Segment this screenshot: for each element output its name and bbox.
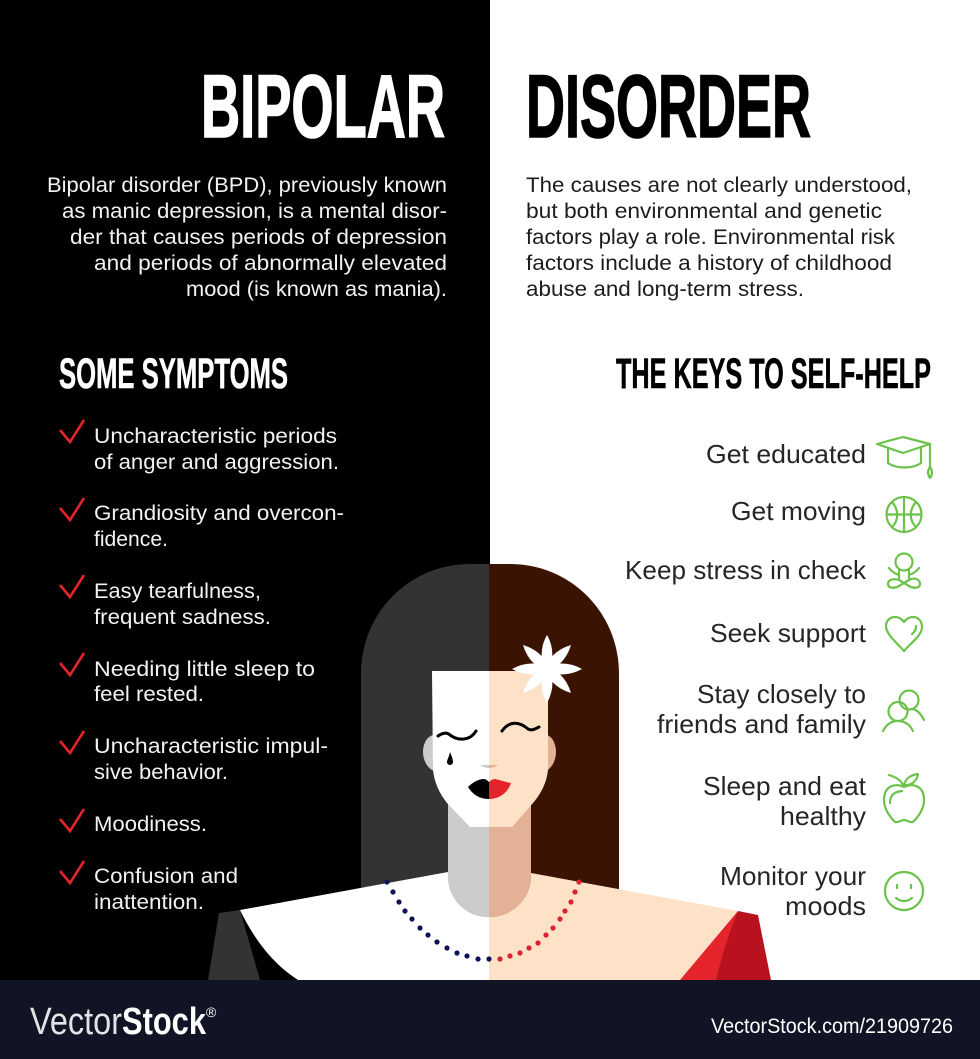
flower [512, 635, 582, 703]
text block: definition: mood (is known as mania). [186, 278, 447, 301]
text block: definition: and periods of abnormally elevated [94, 252, 447, 275]
icon: heart [886, 617, 922, 651]
footer logo: ® [206, 1004, 217, 1020]
footer logo: Vector [30, 1001, 122, 1043]
symptom 2: Grandiosity and overcon- [94, 502, 344, 525]
neck [448, 790, 531, 917]
item: stay close to friends and family [657, 679, 924, 739]
symptom 4: Needing little sleep to [94, 658, 315, 681]
symptom 5: sive behavior. [94, 761, 228, 784]
icon: basketball [886, 497, 922, 532]
item: sleep and eat healthy: healthy [780, 801, 866, 831]
symptom 6: Moodiness. [94, 813, 207, 836]
symptom 5: Uncharacteristic impul- [94, 735, 328, 758]
text block: causes: factors include a history of childhood [526, 252, 892, 275]
text block: causes: abuse and long-term stress. [526, 278, 804, 301]
text block: definition: Bipolar disorder (BPD), previously known [47, 174, 447, 197]
item: get moving: Get moving [731, 496, 866, 526]
text block: causes: but both environmental and genetic [526, 200, 882, 223]
symptom 4: feel rested. [94, 683, 204, 706]
item: monitor your moods: moods [785, 891, 866, 921]
symptoms list [60, 420, 344, 914]
item: monitor your moods [720, 861, 923, 921]
icon: graduation cap [877, 437, 932, 478]
heading: some symptoms: SOME SYMPTOMS [59, 350, 288, 398]
necklace [384, 879, 582, 962]
item: stay close to friends and family: friends and family [657, 709, 866, 739]
title [201, 56, 811, 156]
item: get educated [706, 437, 932, 478]
text block: definition [47, 174, 447, 301]
item: seek support [710, 617, 922, 651]
item: keep stress in check: Keep stress in check [625, 555, 867, 585]
footer logo: Stock [122, 1001, 207, 1043]
symptom 2: fidence. [94, 528, 168, 551]
text block: causes: The causes are not clearly understood, [526, 174, 912, 197]
mouth [468, 779, 511, 799]
item: sleep and eat healthy [703, 771, 924, 831]
hair [361, 564, 619, 934]
symptom 1: Uncharacteristic periods [94, 425, 337, 448]
text block: definition: as manic depression, is a mental disor- [62, 200, 447, 223]
ears [423, 735, 556, 771]
eyes [438, 723, 539, 739]
item: sleep and eat healthy: Sleep and eat [703, 771, 867, 801]
text block: definition: der that causes periods of depression [70, 226, 447, 249]
icon: two people [883, 690, 924, 731]
symptom 5 [60, 731, 328, 784]
icon: apple [884, 774, 924, 822]
navy beads [384, 879, 492, 962]
red beads [497, 879, 582, 962]
symptom 7 [60, 861, 238, 914]
nose [480, 765, 498, 768]
footer image id: VectorStock.com/21909726 [711, 1015, 953, 1038]
symptom 3: Easy tearfulness, [94, 580, 261, 603]
icon: meditation figure [888, 554, 920, 588]
symptom 2 [60, 498, 344, 551]
symptom 1: of anger and aggression. [94, 451, 339, 474]
symptom 3: frequent sadness. [94, 606, 271, 629]
item: monitor your moods: Monitor your [720, 861, 866, 891]
text block: causes: factors play a role. Environmental risk [526, 226, 896, 249]
item: seek support: Seek support [710, 618, 867, 648]
footer bar [0, 980, 980, 1059]
title: BIPOLAR [201, 56, 445, 156]
symptom 4 [60, 653, 315, 706]
tear [447, 752, 453, 765]
item: get moving [731, 496, 922, 532]
item: get educated: Get educated [706, 439, 866, 469]
item: stay close to friends and family: Stay closely to [697, 679, 866, 709]
face [432, 671, 548, 827]
text block: causes [526, 174, 912, 301]
shoulders and dress [208, 872, 771, 980]
icon: smiley [885, 872, 923, 910]
symptom 7: inattention. [94, 891, 204, 914]
footer logo [30, 1001, 217, 1043]
symptom 1 [60, 420, 339, 474]
self-help list [625, 437, 932, 921]
illustration: woman half sad half happy [208, 564, 771, 980]
symptom 6 [60, 809, 207, 836]
symptom 3 [60, 575, 271, 629]
symptom 7: Confusion and [94, 865, 238, 888]
